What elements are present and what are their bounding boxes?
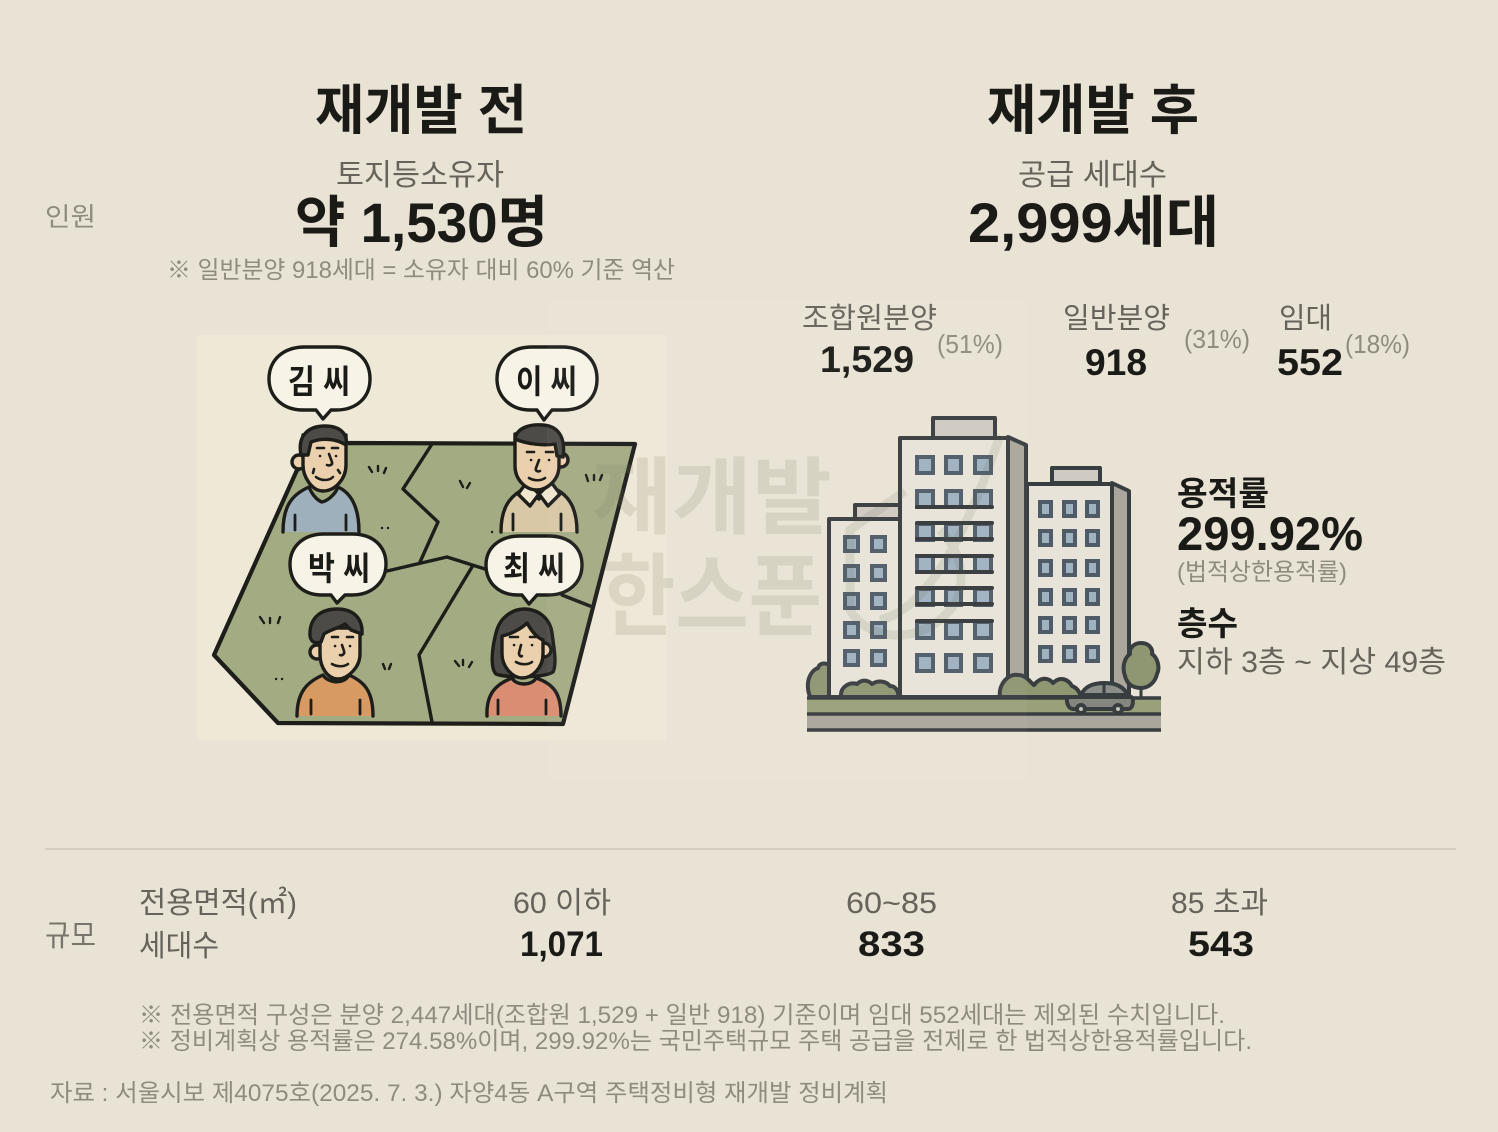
breakdown: rental units: 임대	[1279, 302, 1332, 335]
floors value: 지하 3층 ~ 지상 49층	[1177, 646, 1446, 679]
watermark: 재개발	[592, 451, 832, 545]
walls	[829, 519, 900, 697]
subtitle: land owners: 토지등소유자	[336, 159, 504, 192]
bubble: Kim	[269, 347, 370, 419]
bubble: Kim: 김 씨	[288, 363, 350, 400]
bubble: Park: 박 씨	[308, 550, 370, 587]
number: about 1,530 owners: 약 1,530명	[295, 191, 548, 254]
floors label: 층수	[1177, 605, 1238, 642]
title: after redevelopment: 재개발 후	[987, 81, 1199, 141]
breakdown: union members' units: 1,529	[820, 339, 914, 380]
breakdown: rental units: 552	[1277, 342, 1343, 383]
bushes	[841, 681, 898, 697]
left windows	[845, 537, 885, 665]
bubble: Lee: 이 씨	[516, 363, 577, 400]
floor area ratio label: 용적률	[1177, 475, 1269, 512]
breakdown: union members' units: 조합원분양	[802, 303, 937, 335]
stats: floor area ratio and floors	[1177, 475, 1446, 679]
column: 60 or less: 60 이하	[513, 887, 611, 920]
grass marks	[260, 466, 602, 669]
tree	[1140, 688, 1142, 698]
person: Park	[297, 609, 373, 716]
person: Lee	[501, 425, 577, 532]
panel: before redevelopment heading block	[167, 81, 675, 284]
breakdown: rental units: (18%)	[1345, 329, 1410, 359]
person: Kim	[283, 426, 359, 532]
breakdown: union members' units	[802, 303, 1003, 380]
footnotes	[139, 1002, 1252, 1055]
side walls	[1008, 437, 1026, 697]
subtitle: households supplied: 공급 세대수	[1018, 159, 1167, 192]
panel: after redevelopment heading block	[968, 81, 1219, 254]
footnote: back-calculation: ※ 일반분양 918세대 = 소유자 대비 60% 기준 역산	[167, 257, 675, 284]
source: 자료 : 서울시보 제4075호(2025. 7. 3.) 자양4동 A구역 주택정비형 재개발 정비계획	[50, 1080, 888, 1107]
column: 60 to 85	[846, 887, 937, 964]
illustration: land parcels with four owners	[197, 335, 667, 740]
footnotes: ※ 정비계획상 용적률은 274.58%이며, 299.92%는 국민주택규모 주택 공급을 전제로 한 법적상한용적률입니다.	[139, 1028, 1252, 1055]
column: over 85: 543	[1188, 925, 1254, 964]
floor area ratio value: 299.92%	[1177, 507, 1363, 560]
right windows	[1040, 502, 1098, 661]
illustration: apartment complex	[807, 418, 1161, 730]
table: unit size distribution	[45, 887, 1268, 964]
breakdown: union members' units: (51%)	[937, 329, 1003, 359]
row group label: size: 규모	[45, 920, 96, 953]
land polygon	[214, 443, 635, 724]
row header: exclusive area: 전용면적(㎡)	[139, 887, 297, 920]
column: 60 or less: 1,071	[520, 925, 603, 964]
bubble: Choi	[486, 536, 582, 604]
label: headcount row: 인원	[45, 202, 96, 232]
column: over 85	[1171, 887, 1268, 964]
breakdown: rental units	[1277, 302, 1410, 383]
ground and road	[807, 698, 1161, 713]
breakdown: general sale units: (31%)	[1184, 324, 1250, 354]
person: Choi	[487, 609, 561, 716]
balcony rails	[917, 507, 992, 621]
watermark	[547, 300, 1027, 780]
penthouses	[855, 505, 900, 519]
column: 60 to 85: 60~85	[846, 887, 937, 920]
breakdown: general sale units	[1063, 303, 1250, 383]
column: 60 to 85: 833	[858, 925, 925, 964]
column: over 85: 85 초과	[1171, 887, 1268, 920]
legal limit note: (법적상한용적률)	[1177, 559, 1347, 586]
title: before redevelopment: 재개발 전	[315, 81, 527, 141]
divider	[45, 848, 1456, 850]
bubble: Park	[290, 534, 386, 603]
column: 60 or less	[513, 887, 611, 964]
bubble: Choi: 최 씨	[503, 550, 565, 587]
footnotes: ※ 전용면적 구성은 분양 2,447세대(조합원 1,529 + 일반 918) 기준이며 임대 552세대는 제외된 수치입니다.	[139, 1002, 1225, 1029]
shrubs behind	[808, 663, 829, 697]
car	[1067, 683, 1133, 713]
row header: households: 세대수	[139, 930, 219, 963]
breakdown: general sale units: 918	[1085, 342, 1147, 383]
bubble: Lee	[497, 347, 597, 420]
center windows	[917, 457, 991, 671]
number: 2,999 households: 2,999세대	[968, 191, 1219, 254]
breakdown: general sale units: 일반분양	[1063, 303, 1170, 335]
watermark: 한스푼	[602, 548, 822, 648]
